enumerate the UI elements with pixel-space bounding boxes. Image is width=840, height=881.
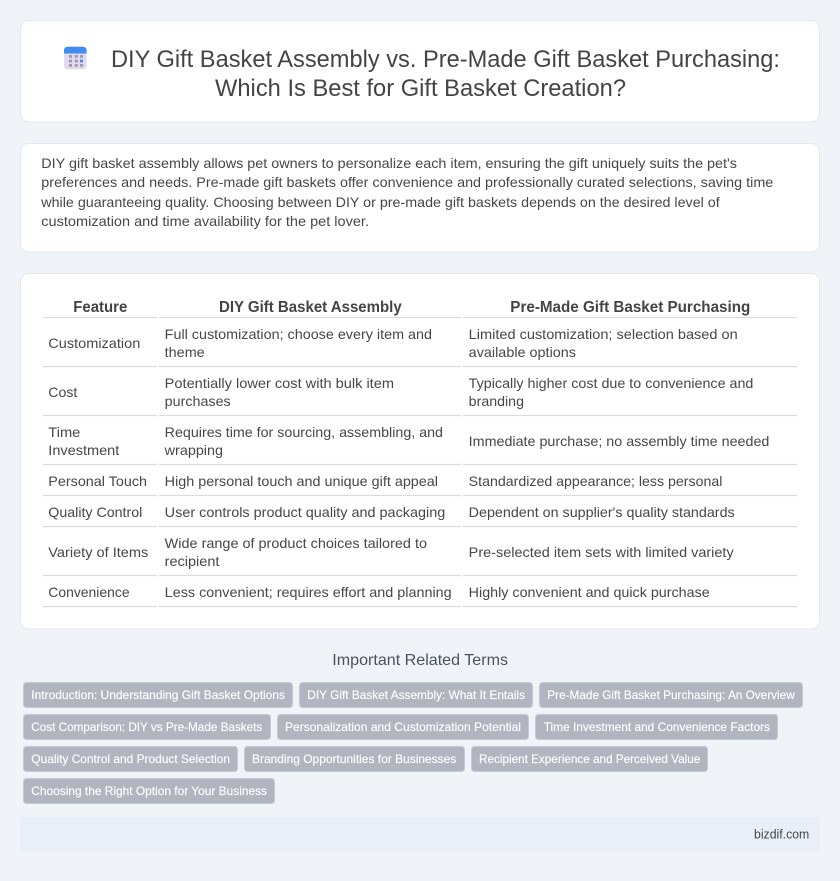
table row: cost: Potentially lower cost with bulk item — [165, 375, 394, 391]
table row: cost: branding — [469, 393, 524, 409]
table row: convenience: Convenience — [48, 584, 130, 600]
table row: personal touch: Personal Touch — [48, 473, 147, 489]
table row: time investment: wrapping — [164, 442, 223, 458]
panel: related term tags: Personalization and Customization Potential — [285, 720, 521, 734]
panel: introduction — [20, 144, 820, 252]
table row: time investment: Requires time for sourcing, assembling, and — [165, 424, 443, 440]
panel: related term tags: Recipient Experience and Perceived Value — [479, 752, 701, 766]
table row: convenience: Less convenient; requires effort and planning — [165, 584, 452, 600]
text block: introduction paragraph: preferences and needs. Pre-made gift baskets offer convenience and professionally curated selections, saving time — [41, 174, 774, 190]
table row: cost: purchases — [165, 393, 231, 409]
table row: quality control: User controls product quality and packaging — [165, 504, 445, 520]
table header — [43, 299, 797, 318]
table row: cost: Cost — [48, 384, 77, 400]
panel: page title — [20, 20, 820, 122]
panel: related term tags: Pre-Made Gift Basket Purchasing: An Overview — [547, 688, 795, 702]
table row: quality control: Quality Control — [48, 504, 142, 520]
table row: variety of items: Wide range of product choices tailored to — [165, 535, 427, 551]
table row: personal touch — [43, 473, 797, 496]
table row: customization: Full customization; choose every item and — [165, 326, 432, 342]
panel: comparison table — [20, 274, 820, 629]
heading: important related terms: Important Related Terms — [332, 652, 508, 669]
panel: related term tags: Choosing the Right Option for Your Business — [31, 784, 267, 798]
table row: time investment: Immediate purchase; no assembly time needed — [469, 433, 769, 449]
table row: time investment: Time — [48, 424, 81, 440]
icon: calendar — [64, 47, 87, 69]
table row: customization — [43, 326, 797, 366]
table row: variety of items: recipient — [165, 553, 220, 569]
table row: cost: Typically higher cost due to convenience and — [469, 375, 753, 391]
table row: quality control: Dependent on supplier's quality standards — [469, 504, 735, 520]
panel: related term tags: Quality Control and Product Selection — [31, 752, 230, 766]
table row: customization: Limited customization; selection based on — [469, 326, 738, 342]
table header: DIY Gift Basket Assembly — [219, 299, 402, 316]
panel: related term tags: Cost Comparison: DIY vs Pre-Made Baskets — [31, 720, 262, 734]
table row: customization: Customization — [48, 335, 140, 351]
table row: convenience — [43, 584, 797, 606]
text block: introduction paragraph: DIY gift basket assembly allows pet owners to personalize each item, ensuring the gift uniquely suits the pet's — [41, 155, 737, 171]
title: DIY Gift Basket Assembly vs. Pre-Made Gift Basket Purchasing: — [111, 46, 780, 73]
table row: time investment — [43, 424, 797, 464]
title — [111, 46, 780, 102]
panel: related term tags: Branding Opportunities for Businesses — [252, 752, 456, 766]
table row: variety of items: Pre-selected item sets with limited variety — [469, 544, 734, 560]
table header: Feature — [73, 299, 127, 316]
table row: variety of items — [43, 535, 797, 576]
table row: variety of items: Variety of Items — [48, 544, 148, 560]
title: Which Is Best for Gift Basket Creation? — [215, 75, 626, 102]
text block: introduction paragraph — [40, 155, 774, 229]
panel: related term tags — [24, 682, 802, 804]
panel: related term tags: DIY Gift Basket Assembly: What It Entails — [307, 688, 525, 702]
table row: personal touch: High personal touch and unique gift appeal — [165, 473, 438, 489]
panel: related term tags: Time Investment and Convenience Factors — [544, 720, 770, 734]
table row: customization: available options — [469, 344, 576, 360]
text block: introduction paragraph: customization and time availability for the pet lover. — [41, 213, 369, 229]
panel: related term tags: Introduction: Understanding Gift Basket Options — [31, 688, 285, 702]
table header: Pre-Made Gift Basket Purchasing — [510, 299, 750, 316]
text block: introduction paragraph: while guaranteeing quality. Choosing between DIY or pre-made gift baskets depends on the desired level of — [40, 194, 720, 210]
footer — [20, 817, 820, 851]
table row: time investment: Investment — [48, 442, 119, 458]
footer: bizdif.com — [754, 826, 809, 841]
table row: personal touch: Standardized appearance; less personal — [469, 473, 722, 489]
table row: quality control — [43, 504, 797, 526]
table row: cost — [43, 375, 797, 416]
table row: customization: theme — [165, 344, 205, 360]
table row: convenience: Highly convenient and quick purchase — [469, 584, 710, 600]
